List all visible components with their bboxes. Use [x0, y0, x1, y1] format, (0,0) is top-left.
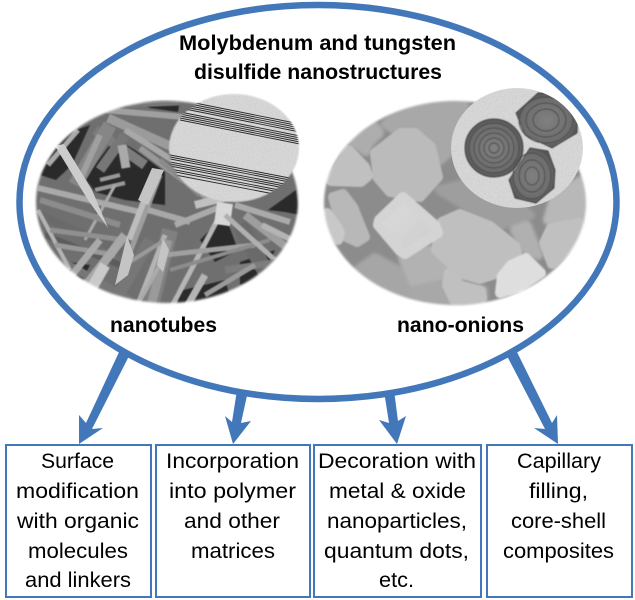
arrow: to surface modification — [79, 350, 130, 444]
box: capillary filling: composites — [503, 540, 614, 563]
inset: single nanotube TEM image — [168, 94, 300, 203]
box: surface modification: molecules — [28, 540, 128, 563]
lower lattice fringes — [168, 154, 290, 194]
panel: nano-onions micrograph — [318, 95, 593, 310]
panel: nanotubes micrograph — [30, 95, 305, 312]
box: surface modification: and linkers — [25, 569, 131, 592]
box: decoration with nanoparticles: quantum dots, — [324, 540, 469, 563]
box: decoration with nanoparticles: nanoparticles, — [327, 510, 467, 533]
label: nano-onions: nano-onions — [397, 314, 524, 337]
onion particle 1 — [465, 119, 523, 177]
dark gaps — [40, 100, 300, 308]
box: decoration with nanoparticles: metal & oxide — [329, 480, 466, 503]
foreground particles — [327, 133, 579, 300]
box: decoration with nanoparticles: etc. — [379, 569, 414, 592]
box: surface modification — [6, 445, 151, 597]
main ellipse outline — [20, 5, 616, 399]
mid rods layer — [40, 103, 270, 310]
title: Molybdenum and tungsten — [179, 32, 456, 55]
title — [179, 32, 456, 84]
box: capillary filling: filling, — [529, 480, 588, 503]
onion particle 3 — [509, 148, 555, 203]
box: incorporation into matrices: matrices — [191, 540, 275, 563]
box: incorporation into matrices: Incorporation — [166, 450, 299, 473]
box: decoration with nanoparticles — [314, 445, 481, 597]
box: incorporation into matrices: and other — [184, 510, 280, 533]
arrow: to polymer incorporation — [225, 390, 251, 444]
arrow: to capillary filling — [506, 350, 558, 444]
box: surface modification: Surface — [41, 450, 114, 473]
box: surface modification: with organic — [16, 510, 139, 533]
onion particle 2 — [516, 93, 578, 148]
box: capillary filling: Capillary — [517, 450, 602, 473]
arrow: to decoration — [379, 390, 406, 444]
box: decoration with nanoparticles: Decoration with — [318, 450, 476, 473]
box: capillary filling — [487, 445, 632, 597]
inset: nano-onions TEM image — [450, 86, 585, 210]
box: incorporation into matrices — [156, 445, 310, 597]
light rods layer — [38, 105, 292, 312]
label: nanotubes: nanotubes — [110, 314, 217, 337]
bright rod tips — [115, 168, 169, 285]
box: capillary filling: core-shell — [511, 510, 606, 533]
upper lattice fringes — [180, 101, 300, 144]
box: surface modification: modification — [16, 480, 139, 503]
large bright rod — [55, 144, 108, 228]
background particles — [353, 104, 587, 305]
box: incorporation into matrices: into polymer — [169, 480, 296, 503]
title: disulfide nanostructures — [194, 61, 442, 84]
